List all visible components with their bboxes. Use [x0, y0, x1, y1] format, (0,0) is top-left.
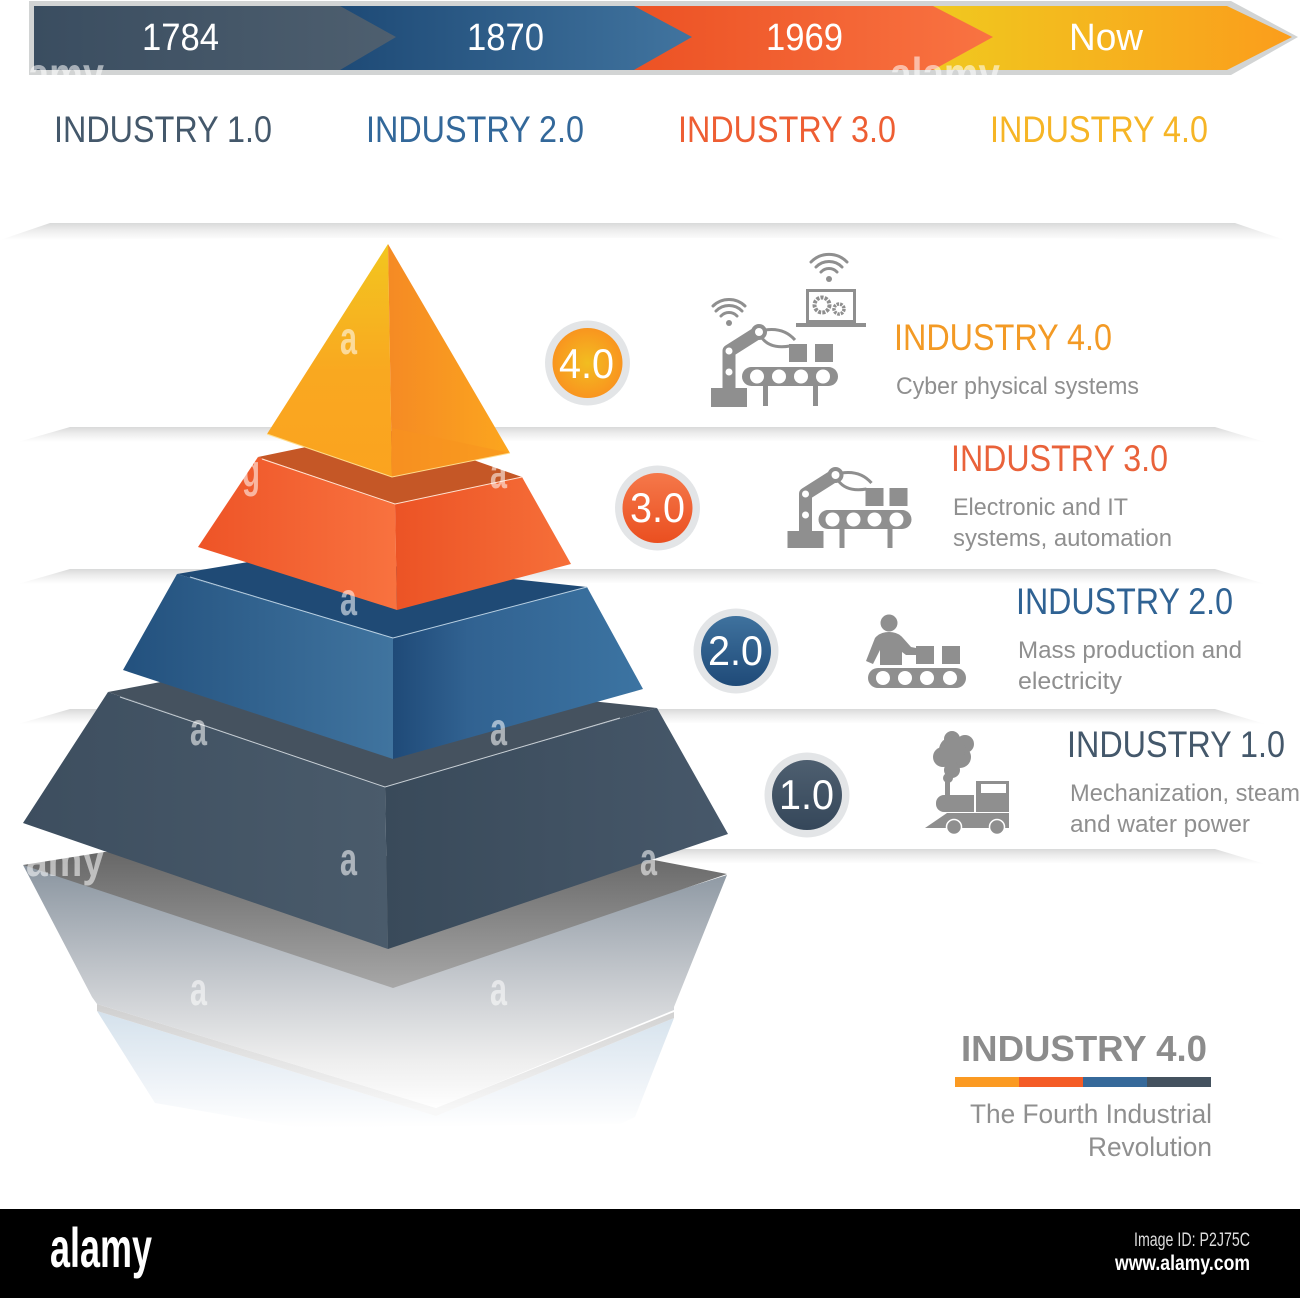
badge 3.0 — [615, 466, 700, 550]
watermark fragments: a — [190, 703, 207, 755]
text: industry 2.0: INDUSTRY 2.0 — [1016, 581, 1233, 622]
layer 3.0 — [198, 430, 571, 610]
badge 4.0: 4.0 — [559, 340, 614, 387]
arrow outline — [29, 1, 1298, 75]
year labels — [142, 17, 1144, 59]
callout: the fourth industrial revolution: INDUSTRY 4.0 — [961, 1028, 1207, 1069]
year labels: 1969 — [766, 17, 843, 59]
text: industry 1.0: Mechanization, steam — [1070, 780, 1300, 807]
bar watermark fragments: alamy — [890, 48, 1000, 100]
watermark fragments: a — [340, 833, 357, 885]
text: industry 3.0: INDUSTRY 3.0 — [951, 438, 1168, 479]
watermark fragments: amy — [26, 834, 104, 886]
text: industry 3.0 — [951, 438, 1172, 552]
icon: wifi laptop — [796, 254, 866, 327]
icon: wifi robot arm and conveyor — [711, 300, 838, 407]
text: industry 2.0 — [1016, 581, 1242, 695]
footer strip — [0, 1209, 1300, 1298]
segment: 1969 — [634, 6, 993, 70]
layer 1.0 — [23, 665, 728, 949]
badge 1.0: 1.0 — [779, 771, 834, 818]
watermark fragments: a — [640, 833, 657, 885]
footer strip: alamy — [50, 1216, 152, 1279]
colour key bar — [955, 1077, 1211, 1087]
badge 3.0: 3.0 — [630, 484, 685, 531]
bar watermark fragments — [30, 56, 1000, 75]
text: industry 4.0 — [894, 317, 1139, 400]
text: industry 4.0: INDUSTRY 4.0 — [894, 317, 1112, 358]
callout: the fourth industrial revolution — [955, 1028, 1212, 1162]
pyramid reflection — [23, 852, 727, 1128]
badge 4.0 — [545, 320, 630, 406]
icon: worker at conveyor — [866, 614, 966, 688]
badge 1.0 — [764, 752, 850, 838]
era headings: INDUSTRY 2.0 — [366, 109, 584, 150]
watermark fragments: g — [242, 445, 260, 497]
year labels: 1870 — [467, 17, 544, 59]
timeline arrow — [29, 1, 1298, 75]
pyramid — [23, 244, 728, 949]
segment: 1784 — [34, 6, 396, 70]
bar watermark fragments: amy — [28, 48, 104, 100]
text: industry 2.0: electricity — [1018, 668, 1122, 695]
text: industry 1.0 — [1067, 724, 1300, 838]
era headings: INDUSTRY 3.0 — [678, 109, 896, 150]
segment: now — [933, 6, 1292, 70]
shelf bands — [0, 223, 1285, 864]
watermark fragments: a — [490, 963, 507, 1015]
footer strip: www.alamy.com — [1114, 1252, 1250, 1275]
watermark fragments: a — [340, 312, 357, 364]
watermark fragments: a — [190, 963, 207, 1015]
text: industry 2.0: Mass production and — [1018, 637, 1242, 664]
footer strip: Image ID: P2J75C — [1134, 1230, 1250, 1251]
badge 2.0 — [694, 608, 778, 694]
layer 4.0 — [267, 244, 510, 477]
year labels: Now — [1069, 17, 1144, 59]
watermark fragments: a — [490, 703, 507, 755]
text: industry 3.0: systems, automation — [953, 525, 1172, 552]
badge 2.0: 2.0 — [708, 627, 763, 674]
icon: robot arm and conveyor — [788, 467, 912, 548]
text: industry 1.0: and water power — [1070, 811, 1250, 838]
text: industry 4.0: Cyber physical systems — [896, 373, 1139, 400]
text: industry 3.0: Electronic and IT — [953, 494, 1128, 521]
watermark fragments — [26, 312, 657, 1015]
era headings: INDUSTRY 4.0 — [990, 109, 1208, 150]
callout: the fourth industrial revolution: Revolution — [1088, 1132, 1212, 1162]
icon: connected robot and laptop — [711, 254, 866, 407]
segment: 1870 — [340, 6, 692, 70]
era headings — [54, 109, 1208, 150]
era headings: INDUSTRY 1.0 — [54, 109, 272, 150]
layer 2.0 — [123, 555, 643, 759]
watermark fragments: a — [340, 573, 357, 625]
icon: steam locomotive — [925, 731, 1009, 834]
watermark fragments: a — [490, 446, 507, 498]
callout: the fourth industrial revolution: The Fourth Industrial — [970, 1099, 1212, 1129]
year labels: 1784 — [142, 17, 219, 59]
